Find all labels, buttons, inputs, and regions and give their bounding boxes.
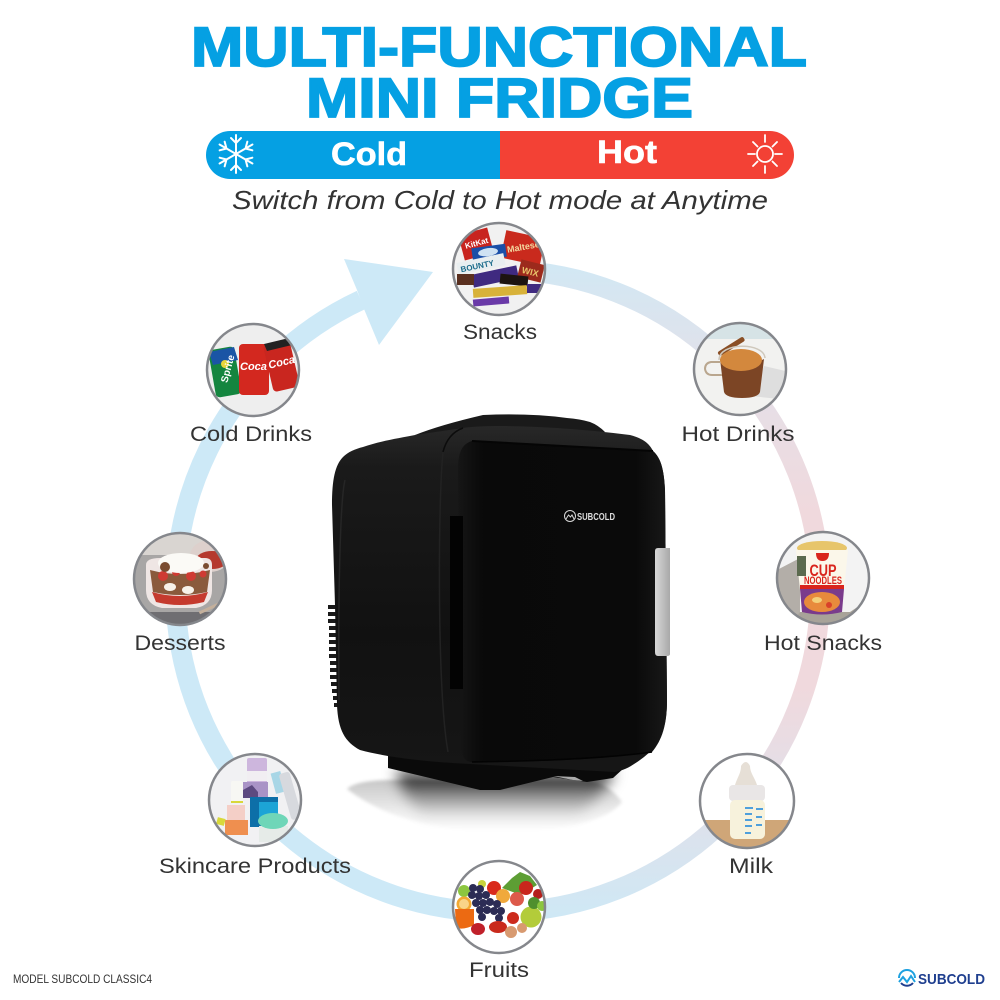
cold drinks label: Cold Drinks	[190, 423, 312, 446]
item: hot drinks	[682, 320, 794, 446]
snacks photo: BOUNTY	[460, 258, 495, 274]
item: hot snacks	[764, 532, 882, 655]
door top lid line	[472, 441, 653, 451]
hot drinks label: Hot Drinks	[682, 423, 794, 446]
snacks ring	[453, 223, 545, 315]
desserts label: Desserts	[134, 632, 226, 655]
hot drink photo	[704, 324, 784, 398]
cup noodles photo	[778, 541, 856, 623]
title: MULTI-FUNCTIONAL	[191, 15, 807, 78]
skincare label: Skincare Products	[159, 855, 351, 878]
snacks photo: KitKat	[464, 236, 489, 251]
desserts ring	[134, 533, 226, 625]
fridge top handle	[415, 414, 605, 450]
fridge logo	[564, 510, 615, 523]
brand logo	[899, 970, 985, 988]
milk ring	[700, 754, 794, 848]
fridge logo: SUBCOLD	[577, 512, 615, 523]
door handle	[655, 548, 670, 656]
circular arrow ring	[175, 259, 820, 912]
cans photo	[208, 338, 300, 398]
fridge vents	[328, 605, 342, 707]
title	[191, 15, 807, 129]
skincare photo	[216, 758, 302, 842]
skincare ring	[209, 754, 301, 846]
subtitle: Switch from Cold to Hot mode at Anytime	[232, 185, 768, 215]
model number: MODEL SUBCOLD CLASSIC4	[13, 972, 152, 986]
milk label: Milk	[729, 855, 774, 878]
snacks photo	[456, 228, 549, 307]
item: milk	[700, 754, 794, 878]
logo icon	[899, 970, 915, 986]
snacks photo: Maltesers	[506, 238, 549, 255]
logo wordmark: SUBCOLD	[918, 971, 985, 988]
fruits label: Fruits	[469, 959, 529, 982]
fridge body side	[332, 426, 667, 772]
ring: warm side	[499, 270, 820, 912]
fridge shadow	[347, 772, 622, 832]
icon: sun	[748, 135, 782, 173]
snacks label: Snacks	[463, 321, 537, 344]
door hinge groove	[450, 516, 463, 689]
dessert photo	[142, 534, 224, 624]
fruits ring	[453, 861, 545, 953]
fruit photo	[455, 872, 547, 938]
item: skincare products	[159, 754, 351, 878]
label: cold: Cold	[331, 136, 407, 172]
title: MINI FRIDGE	[306, 66, 693, 129]
cold drinks ring	[207, 324, 299, 416]
snacks photo: WIX	[521, 265, 540, 279]
item: desserts	[134, 533, 230, 655]
ring: cold side with arrow	[175, 259, 499, 912]
fridge base	[388, 750, 630, 790]
cans photo: Coca	[240, 361, 267, 373]
item: fruits	[453, 861, 547, 982]
cup noodles photo: CUP	[810, 561, 836, 580]
cans photo: Coca	[267, 354, 296, 372]
icon: snowflake	[217, 135, 255, 173]
hot drinks ring	[694, 323, 786, 415]
cans photo: Sprite	[219, 353, 238, 384]
milk bottle photo	[706, 762, 788, 847]
cup noodles photo: NOODLES	[804, 575, 842, 587]
label: hot: Hot	[597, 134, 657, 170]
hot snacks label: Hot Snacks	[764, 632, 882, 655]
item: snacks	[453, 223, 549, 344]
hot snacks ring	[777, 532, 869, 624]
item: cold drinks	[190, 324, 312, 446]
cold and hot mode pill	[206, 131, 794, 179]
fridge door	[458, 441, 667, 762]
mini fridge	[328, 414, 670, 790]
